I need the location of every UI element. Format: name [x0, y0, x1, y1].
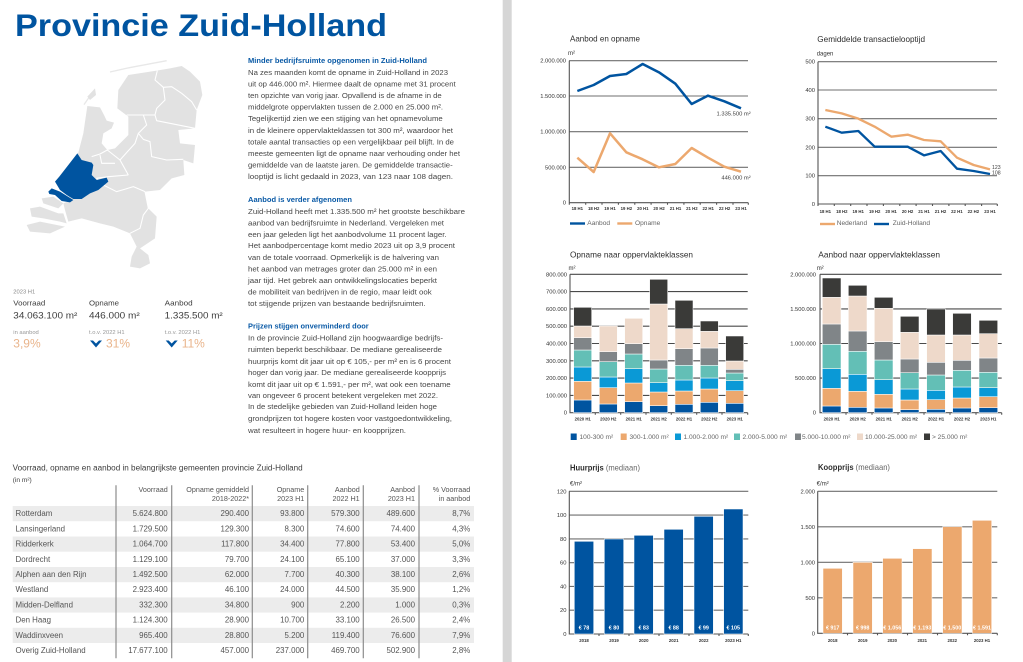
line chart: Aanbod en opname: 0 [563, 201, 566, 207]
stacked bar chart: Opname naar oppervlakteklassen: 2022 H1 [676, 416, 693, 422]
line chart: Aanbod en opname: m² [568, 51, 575, 57]
bar chart: Huurprijs: € 78 [579, 626, 589, 632]
text block: Minder bedrijfsruimte opgenomen: looptijd is licht gedaald in 2023, van 123 naar 108 dagen. [248, 172, 453, 181]
bar chart: Huurprijs: 2018 [579, 638, 589, 643]
key figure: Aanbod: t.o.v. 2022 H1 [165, 330, 200, 336]
stacked bar chart: Aanbod naar oppervlakteklassen: Aanbod naar oppervlakteklassen [818, 250, 940, 260]
row: Westland [16, 585, 470, 594]
stacked bar chart: Aanbod naar oppervlakteklassen: 1.500.000 [790, 307, 816, 313]
bar chart: Huurprijs: 2019 [609, 638, 619, 643]
bar chart: Huurprijs: 40 [560, 584, 566, 590]
row: Lansingerland: Lansingerland [16, 524, 65, 533]
bar chart: Koopprijs: 2022 [948, 638, 958, 643]
row: Rotterdam: 8,7% [452, 509, 470, 518]
row: Rotterdam [16, 509, 470, 518]
row: Lansingerland: 8.300 [285, 524, 305, 533]
row: Overig Zuid-Holland: 237.000 [276, 646, 305, 655]
legend: Nederland [837, 220, 867, 227]
stacked bar chart: Aanbod naar oppervlakteklassen: 1.000.000 [790, 342, 816, 348]
row: Waddinxveen: 76.600 [391, 631, 416, 640]
bar chart: Koopprijs: 2020 [888, 638, 898, 643]
row: Den Haag: 26.500 [391, 616, 416, 625]
row: Ridderkerk: 53.400 [391, 540, 416, 548]
text block: Prijzen stijgen onverminderd door: In de provincie Zuid-Holland zijn hoogwaardige bedrijfs- [248, 334, 443, 342]
row: Rotterdam: 290.400 [220, 509, 250, 518]
stacked bar chart: Aanbod naar oppervlakteklassen: 2020 H1 [824, 416, 840, 422]
bar chart: Koopprijs: Koopprijs (mediaan) [818, 463, 890, 472]
map of the Netherlands [27, 61, 202, 268]
text block: Aanbod is verder afgenomen [247, 195, 465, 308]
row: Midden-Delfland: 1.000 [395, 600, 416, 609]
key figure: Opname: t.o.v. 2022 H1 [89, 330, 125, 336]
row: Westland: 44.500 [336, 585, 360, 594]
period label: 2023 H1 [13, 290, 35, 296]
row: Rotterdam: 93.800 [280, 509, 305, 518]
table header: Aanbod [390, 485, 415, 494]
row: Waddinxveen: 119.400 [332, 631, 360, 640]
key figure: Voorraad: in aanbod [13, 330, 39, 336]
stacked bar chart: Aanbod naar oppervlakteklassen: 2.000.000 [790, 272, 816, 278]
stacked bar chart: Opname naar oppervlakteklassen: 500.000 [546, 324, 567, 330]
row: Midden-Delfland: 0,3% [452, 600, 470, 609]
key figure: Opname [89, 298, 140, 350]
bar chart: Huurprijs: € 83 [638, 626, 649, 632]
bar chart: Huurprijs: 20 [560, 608, 566, 614]
row: Dordrecht: 79.700 [225, 555, 250, 564]
row: Midden-Delfland: 332.300 [139, 600, 168, 609]
row: Waddinxveen: 5.200 [285, 631, 305, 640]
line chart: Gemiddelde transactielooptijd: 500 [805, 60, 815, 66]
table header: Opname [277, 485, 304, 494]
row: Overig Zuid-Holland: 2,8% [452, 646, 470, 655]
stacked bar chart: Opname naar oppervlakteklassen [546, 250, 748, 422]
text block: Prijzen stijgen onverminderd door: wat resulteert in hogere huur- en koopprijzen. [247, 426, 406, 435]
line chart: Aanbod en opname: 19 H2 [621, 206, 633, 211]
line chart: Aanbod en opname: 22 H2 [719, 206, 731, 211]
stacked bar chart: Opname naar oppervlakteklassen: 400.000 [546, 342, 567, 348]
table heading [13, 463, 303, 484]
row: Overig Zuid-Holland: 469.700 [331, 646, 360, 655]
row: Den Haag: 28.900 [225, 616, 250, 625]
key figure: Opname: 31% [106, 336, 130, 350]
row: Ridderkerk [16, 540, 470, 548]
bar chart: Koopprijs: 2.000 [800, 489, 815, 495]
bar chart: Huurprijs: 2023 H1 [725, 638, 742, 643]
legend: oppervlakteklassen: 100-300 m² [580, 434, 614, 441]
row: Den Haag [16, 616, 470, 625]
stacked bar chart: Opname naar oppervlakteklassen: 2020 H1 [575, 416, 591, 422]
row: Waddinxveen: 7,9% [452, 631, 470, 640]
text block: Aanbod is verder afgenomen: de mobiliteit van bedrijven in de regio, maar leidt ook [248, 288, 432, 297]
row: Overig Zuid-Holland: 17.677.100 [128, 646, 168, 655]
row: Lansingerland: 74.400 [391, 524, 416, 533]
line chart: Gemiddelde transactielooptijd: 23 H1 [984, 209, 996, 214]
stacked bar chart: Opname naar oppervlakteklassen: 700.000 [546, 290, 567, 296]
text block: Prijzen stijgen onverminderd door: In de stedelijke gebieden van Zuid-Holland leiden hoge [248, 402, 437, 411]
line chart: Aanbod en opname: 446.000 m² [721, 175, 751, 181]
line chart: Gemiddelde transactielooptijd: dagen [817, 52, 833, 58]
row: Den Haag: 1.124.300 [133, 616, 168, 625]
text block: Aanbod is verder afgenomen: jaar tijd. Het gebrek aan ontwikkelingslocaties beperkt [247, 276, 438, 285]
line chart: Gemiddelde transactielooptijd: 19 H1 [852, 209, 865, 214]
legend: oppervlakteklassen: 2.000-5.000 m² [742, 434, 788, 441]
series: Opname [577, 133, 741, 172]
key figure: Aanbod: 1.335.500 m² [165, 310, 223, 320]
line chart: Gemiddelde transactielooptijd: 108 [992, 170, 1001, 176]
line chart: Aanbod en opname: 20 H1 [637, 206, 649, 211]
bar chart: Koopprijs: 2018 [828, 638, 838, 643]
title: Provincie Zuid-Holland [15, 7, 387, 43]
row: Den Haag: 2,4% [452, 616, 470, 625]
bar chart: Koopprijs: 2021 [918, 638, 928, 643]
text block: Minder bedrijfsruimte opgenomen: ten opzichte van vorig jaar. Opvallend is de afname in de [248, 91, 442, 100]
stacked bar chart: Aanbod naar oppervlakteklassen: 2023 H1 [980, 416, 997, 422]
bar chart: Huurprijs: 120 [557, 489, 566, 495]
text block: Aanbod is verder afgenomen: van de totale voorraad. Opmerkelijk is de halvering van [248, 253, 439, 262]
bar chart: Huurprijs: 2022 [699, 638, 709, 643]
bars [823, 520, 992, 633]
table header: 2022 H1 [333, 494, 360, 503]
legend: oppervlakteklassen: 300-1.000 m² [630, 434, 670, 441]
key figure: Voorraad: 3,9% [13, 336, 41, 350]
legend: oppervlakteklassen: 10.000-25.000 m² [865, 434, 918, 441]
row: Midden-Delfland: 2.200 [340, 600, 360, 609]
table header: Voorraad [139, 485, 168, 494]
stacked bar chart: Opname naar oppervlakteklassen: 100.000 [546, 393, 567, 399]
line chart: Aanbod en opname: 500.000 [545, 165, 566, 171]
row: Waddinxveen: Waddinxveen [16, 631, 63, 640]
line chart: Gemiddelde transactielooptijd: 21 H2 [935, 209, 947, 214]
row: Lansingerland: 4,3% [452, 524, 470, 533]
table header: 2023 H1 [388, 494, 415, 503]
bar chart: Huurprijs: 2020 [639, 638, 649, 643]
text block: Aanbod is verder afgenomen: Het aanbodpercentage komt medio 2023 uit op 3,9 procent [248, 241, 456, 250]
text block: Aanbod is verder afgenomen: het aanbod van metrages groter dan 25.000 m² in een [248, 264, 437, 274]
stacked bar chart: Opname naar oppervlakteklassen: 2020 H2 [600, 416, 617, 422]
line chart: Aanbod en opname: 19 H1 [604, 206, 616, 211]
row: Dordrecht [16, 555, 470, 564]
row: Westland: 35.900 [391, 585, 416, 594]
stacked bar chart: Opname naar oppervlakteklassen: 600.000 [546, 307, 567, 313]
text block: Minder bedrijfsruimte opgenomen: middelgrote oppervlakten tussen de 2.000 en 25.000 m². [248, 103, 443, 112]
row: Alphen aan den Rijn: 38.100 [391, 570, 416, 579]
row: Ridderkerk: 117.800 [221, 540, 250, 548]
row: Westland: 2.923.400 [133, 585, 168, 594]
row: Dordrecht: Dordrecht [16, 555, 51, 564]
text block: Minder bedrijfsruimte opgenomen [248, 56, 461, 181]
row: Lansingerland: 129.300 [220, 524, 250, 533]
row: Alphen aan den Rijn: 7.700 [285, 570, 305, 579]
line chart: Aanbod en opname: 22 H1 [702, 206, 715, 211]
row: Ridderkerk: 77.800 [336, 540, 360, 548]
key figure: Aanbod: Aanbod [165, 298, 193, 307]
row: Dordrecht: 3,3% [452, 555, 470, 564]
text block: Minder bedrijfsruimte opgenomen: uit op 446.000 m². Hiermee daalt de opname met 31 procent [248, 79, 457, 88]
stacked bar chart: Opname naar oppervlakteklassen: 2021 H1 [626, 416, 642, 422]
series: Aanbod [577, 64, 741, 108]
line chart: Gemiddelde transactielooptijd: 18 H1 [820, 209, 832, 214]
text block: Aanbod is verder afgenomen: Aanbod is verder afgenomen [248, 195, 352, 204]
row: Lansingerland [16, 524, 470, 533]
bar chart: Huurprijs: Huurprijs (mediaan) [570, 464, 640, 472]
line chart: Aanbod en opname: 23 H1 [735, 206, 747, 211]
key figure: Opname: Opname [89, 298, 119, 307]
row: Rotterdam: 5.624.800 [133, 509, 168, 518]
line chart: Gemiddelde transactielooptijd: 19 H2 [869, 209, 881, 214]
row: Den Haag: 33.100 [336, 616, 360, 625]
line chart: Gemiddelde transactielooptijd: 100 [805, 174, 815, 180]
line chart: Gemiddelde transactielooptijd: 18 H2 [836, 209, 848, 214]
key figure: Voorraad [13, 298, 77, 350]
line chart: Aanbod en opname: 1.335.500 m² [717, 111, 751, 117]
bar chart: Huurprijs: € 99 [698, 626, 709, 632]
line chart: Gemiddelde transactielooptijd: 21 H1 [918, 209, 930, 214]
row: Dordrecht: 65.100 [336, 555, 360, 564]
row: Ridderkerk: 34.400 [280, 540, 305, 548]
text block: Minder bedrijfsruimte opgenomen: gemiddelde van de laatste jaren. De gemiddelde transactie- [248, 161, 453, 170]
line chart: Gemiddelde transactielooptijd: 123 [992, 165, 1001, 171]
bar chart: Koopprijs: € 1.056 [883, 626, 901, 632]
line chart: Gemiddelde transactielooptijd: 20 H2 [902, 209, 914, 214]
bar chart: Koopprijs: 2019 [858, 638, 868, 643]
table header: 2023 H1 [277, 494, 304, 503]
row: Waddinxveen: 28.800 [225, 631, 250, 640]
bar chart: Huurprijs: 2021 [669, 638, 679, 643]
line chart: Aanbod en opname: 1.500.000 [540, 94, 566, 100]
text block: Prijzen stijgen onverminderd door: ruimten beperkt beschikbaar. De mediane gerealiseerde [248, 345, 442, 354]
row: Ridderkerk: 1.064.700 [133, 540, 168, 548]
row: Den Haag: 10.700 [280, 616, 305, 625]
bar chart: Huurprijs: € 80 [609, 626, 619, 632]
bar chart: Huurprijs [557, 464, 748, 643]
bar chart: Koopprijs: € 1.591 [973, 626, 991, 632]
text block: Minder bedrijfsruimte opgenomen: totale aantal transacties op een vergelijkbaar peil blijft. In de [248, 137, 454, 146]
key figure: Aanbod [165, 298, 223, 350]
bar chart: Huurprijs: €/m² [570, 482, 582, 488]
stacked bar chart: Aanbod naar oppervlakteklassen [790, 250, 1002, 422]
row: Dordrecht: 24.100 [280, 555, 305, 564]
bar chart: Huurprijs: 80 [560, 537, 566, 543]
legend: Opname [635, 220, 661, 227]
bar chart: Huurprijs: 0 [563, 632, 566, 638]
row: Lansingerland: 1.729.500 [133, 524, 168, 533]
row: Lansingerland: 74.600 [336, 524, 360, 533]
key figure: Voorraad: 34.063.100 m² [13, 310, 77, 320]
row: Overig Zuid-Holland: Overig Zuid-Holland [16, 646, 86, 655]
line chart: Aanbod en opname: 2.000.000 [540, 59, 566, 65]
stacked bars [574, 279, 744, 413]
legend [820, 220, 930, 227]
bar chart: Koopprijs: € 1.193 [913, 626, 931, 632]
legend: oppervlakteklassen: 1.000-2.000 m² [684, 434, 729, 441]
legend: Aanbod [587, 220, 610, 227]
stacked bar chart: Aanbod naar oppervlakteklassen: 2022 H2 [954, 416, 971, 422]
row: Midden-Delfland [16, 600, 470, 609]
bars [574, 509, 743, 634]
text block: Prijzen stijgen onverminderd door: huurprijs komt dit jaar uit op € 105,- per m² en is 6 procent [248, 357, 452, 366]
text block: Prijzen stijgen onverminderd door: Prijzen stijgen onverminderd door [248, 322, 369, 330]
row: Alphen aan den Rijn: 40.300 [336, 570, 360, 579]
bar chart: Koopprijs: 1.000 [800, 560, 815, 566]
bar chart: Koopprijs: 1.500 [800, 525, 815, 531]
line chart: Gemiddelde transactielooptijd: 0 [812, 202, 815, 208]
key figure: Opname: 446.000 m² [89, 310, 140, 320]
stacked bar chart: Opname naar oppervlakteklassen: m² [568, 266, 576, 272]
row: Overig Zuid-Holland [16, 646, 470, 655]
row: Alphen aan den Rijn: 62.000 [225, 570, 250, 579]
table heading: (in m²) [13, 477, 32, 484]
text block: Aanbod is verder afgenomen: Zuid-Holland heeft met 1.335.500 m² het grootste beschikbare [248, 207, 465, 216]
row: Westland: 24.000 [280, 585, 305, 594]
line chart: Gemiddelde transactielooptijd: 20 H1 [885, 209, 897, 214]
row: Westland: 1,2% [452, 585, 470, 594]
table header [139, 485, 470, 503]
table header: % Voorraad [433, 485, 470, 494]
line chart: Aanbod en opname: 20 H2 [653, 206, 665, 211]
bar chart: Koopprijs: €/m² [817, 482, 829, 488]
stacked bars [822, 278, 998, 413]
text block: Aanbod is verder afgenomen: tot stijgende prijzen van bestaande bedrijfsruimten. [248, 299, 426, 308]
row: Dordrecht: 1.129.100 [133, 555, 168, 564]
line chart: Aanbod en opname: 21 H2 [686, 206, 698, 211]
row: Alphen aan den Rijn: 2,6% [452, 570, 470, 579]
stacked bar chart: Opname naar oppervlakteklassen: 300.000 [546, 359, 567, 365]
row: Rotterdam: Rotterdam [16, 509, 53, 518]
row: Rotterdam: 579.300 [331, 509, 360, 518]
legend: Zuid-Holland [893, 220, 930, 227]
row: Overig Zuid-Holland: 502.900 [386, 646, 416, 655]
bar chart: Koopprijs [800, 463, 997, 643]
bar chart: Huurprijs: 60 [560, 561, 566, 567]
row: Den Haag: Den Haag [16, 616, 51, 625]
series: Zuid-Holland [825, 127, 990, 174]
line chart: Aanbod en opname [540, 34, 751, 227]
row: Westland: Westland [16, 585, 48, 594]
row: Dordrecht: 37.000 [391, 555, 416, 564]
key figure: Aanbod: 11% [182, 336, 205, 350]
line chart: Aanbod en opname: Aanbod en opname [570, 34, 640, 44]
legend [570, 220, 661, 227]
text block: Prijzen stijgen onverminderd door: van ongeveer 6 procent betekent vergeleken met 2022. [248, 391, 438, 400]
stacked bar chart: Opname naar oppervlakteklassen: 2023 H1 [727, 416, 743, 422]
legend: oppervlakteklassen: 5.000-10.000 m² [802, 434, 851, 441]
text block: Prijzen stijgen onverminderd door: grondprijzen tot hogere kosten voor vastgoedontwikkeling, [248, 414, 452, 423]
row: Alphen aan den Rijn: 1.492.500 [133, 570, 168, 579]
text block: Aanbod is verder afgenomen: een jaar geleden ligt het aanbodvolume 11 procent lager. [248, 230, 447, 239]
row: Alphen aan den Rijn [16, 570, 470, 579]
line chart: Gemiddelde transactielooptijd: 200 [805, 145, 815, 151]
stacked bar chart: Opname naar oppervlakteklassen: Opname naar oppervlakteklassen [570, 250, 693, 260]
text block: Prijzen stijgen onverminderd door: komt dit jaar uit op € 1.591,- per m², wat ook een toename [248, 380, 451, 389]
stacked bar chart: Opname naar oppervlakteklassen: 0 [564, 411, 567, 417]
bar chart: Koopprijs: € 1.500 [943, 626, 961, 632]
bar chart: Koopprijs: 2023 H1 [974, 638, 991, 643]
stacked bar chart: Aanbod naar oppervlakteklassen: 0 [813, 411, 816, 417]
legend: oppervlakteklassen: > 25.000 m² [932, 434, 968, 441]
legend: oppervlakteklassen [571, 434, 968, 441]
table header: Opname gemiddeld [186, 485, 249, 494]
bar chart: Koopprijs: 500 [805, 596, 815, 602]
text block: Aanbod is verder afgenomen: aanbod van bedrijfsruimte in Nederland. Vergeleken met [248, 218, 445, 227]
table header: Aanbod [335, 485, 360, 494]
stacked bar chart: Aanbod naar oppervlakteklassen: 2021 H1 [876, 416, 892, 422]
bar chart: Huurprijs: € 105 [727, 626, 740, 632]
line chart: Aanbod en opname: 1.000.000 [540, 130, 566, 136]
text block: Minder bedrijfsruimte opgenomen: Tegelijkertijd zien we een stijging van het opnamevolume [248, 114, 443, 123]
bar chart: Huurprijs: 100 [557, 513, 566, 519]
line chart: Gemiddelde transactielooptijd: 400 [805, 88, 815, 94]
stacked bar chart: Aanbod naar oppervlakteklassen: 2021 H2 [902, 416, 918, 422]
stacked bar chart: Opname naar oppervlakteklassen: 800.000 [546, 272, 567, 278]
line chart: Gemiddelde transactielooptijd [805, 35, 1001, 227]
stacked bar chart: Aanbod naar oppervlakteklassen: m² [817, 266, 824, 272]
bar chart: Koopprijs: € 998 [856, 626, 869, 632]
stacked bar chart: Aanbod naar oppervlakteklassen: 2022 H1 [928, 416, 945, 422]
text block: Minder bedrijfsruimte opgenomen: Minder bedrijfsruimte opgenomen in Zuid-Holland [248, 56, 427, 65]
bar chart: Koopprijs: € 917 [826, 626, 839, 632]
row: Waddinxveen: 965.400 [139, 631, 168, 640]
row: Overig Zuid-Holland: 457.000 [220, 646, 250, 655]
row: Midden-Delfland: 900 [291, 600, 305, 609]
line chart: Gemiddelde transactielooptijd: 22 H2 [968, 209, 980, 214]
row: Midden-Delfland: Midden-Delfland [16, 600, 73, 609]
text block: Minder bedrijfsruimte opgenomen: Na zes maanden komt de opname in Zuid-Holland in 2023 [248, 68, 448, 77]
table heading: Voorraad, opname en aanbod in belangrijkste gemeenten provincie Zuid-Holland [13, 463, 303, 472]
stacked bar chart: Opname naar oppervlakteklassen: 200.000 [546, 376, 567, 382]
text block: Minder bedrijfsruimte opgenomen: in de kleinere oppervlakteklassen tot 300 m², waardoor het [248, 126, 454, 135]
line chart: Gemiddelde transactielooptijd: 300 [805, 117, 815, 123]
line chart: Aanbod en opname: 18 H2 [588, 206, 600, 211]
row: Rotterdam: 489.600 [386, 509, 416, 518]
key figure: Voorraad: Voorraad [13, 298, 45, 307]
text block: Prijzen stijgen onverminderd door: hoger dan vorig jaar. De mediane gerealiseerde koopprijs [248, 368, 446, 377]
table header: 2018-2022* [212, 494, 249, 503]
stacked bar chart: Aanbod naar oppervlakteklassen: 2020 H2 [850, 416, 866, 422]
row: Alphen aan den Rijn: Alphen aan den Rijn [16, 570, 87, 579]
line chart: Gemiddelde transactielooptijd: Gemiddelde transactielooptijd [817, 35, 925, 44]
row: Waddinxveen [16, 631, 470, 640]
table header: in aanbod [439, 494, 470, 503]
row: Westland: 46.100 [225, 585, 250, 594]
line chart: Aanbod en opname: 18 H1 [572, 206, 584, 211]
line chart: Gemiddelde transactielooptijd: 22 H1 [951, 209, 963, 214]
row: Midden-Delfland: 34.800 [225, 600, 250, 609]
bar chart: Koopprijs: 0 [812, 631, 815, 637]
line chart: Aanbod en opname: 21 H1 [670, 206, 682, 211]
text block: Prijzen stijgen onverminderd door [247, 322, 452, 435]
bar chart: Huurprijs: € 88 [668, 626, 679, 632]
series: Nederland [825, 110, 990, 169]
table: gemeenten [13, 485, 474, 658]
stacked bar chart: Aanbod naar oppervlakteklassen: 500.000 [795, 376, 816, 382]
stacked bar chart: Opname naar oppervlakteklassen: 2022 H2 [701, 416, 718, 422]
text block: Minder bedrijfsruimte opgenomen: meeste gemeenten ligt de opname naar verhouding onder het [248, 149, 461, 158]
row: Ridderkerk: 5,0% [452, 540, 470, 548]
row: Ridderkerk: Ridderkerk [16, 540, 54, 548]
stacked bar chart: Opname naar oppervlakteklassen: 2021 H2 [651, 416, 667, 422]
